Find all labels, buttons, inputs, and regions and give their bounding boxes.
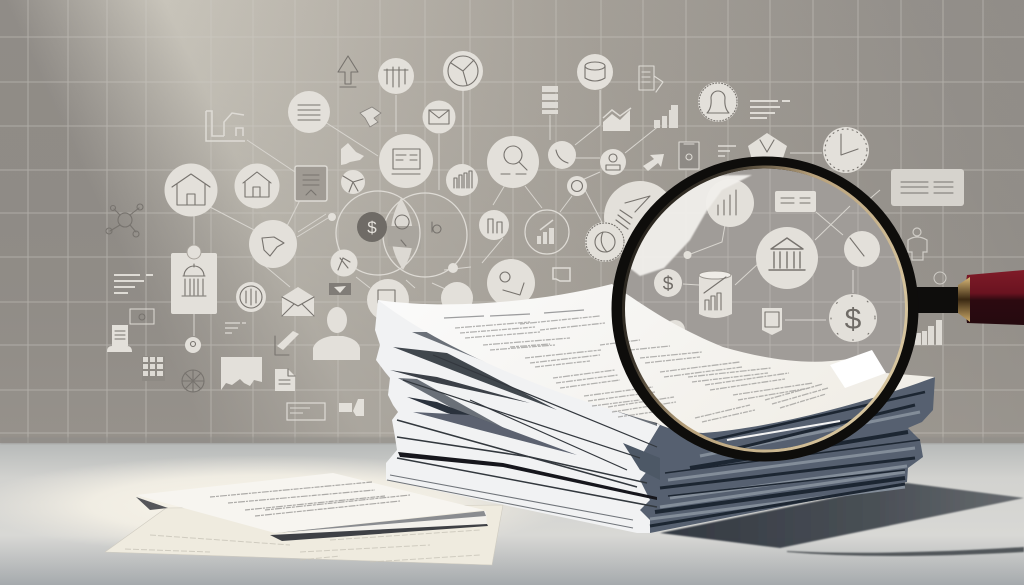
icon: bell circle: [698, 82, 738, 122]
icon: light bulb circle: [185, 337, 201, 353]
icon: bars lower right: [915, 320, 942, 345]
icon: globe: [341, 170, 365, 194]
icon: small bars in lens: [670, 320, 685, 330]
icon: speech bubble circle: [367, 279, 409, 321]
icon: bars circle: [446, 164, 478, 196]
icon: laptop circle: [379, 134, 433, 188]
icon: gear circle: [585, 222, 625, 262]
curled highlight: [830, 350, 886, 388]
icon: arrow: [643, 154, 664, 171]
icon: small house circle: [234, 164, 280, 208]
icon: small circle right: [934, 272, 946, 284]
icon: ring circle: [567, 176, 587, 196]
icon: document: [275, 369, 295, 391]
icon: text box: [287, 403, 325, 420]
connector lines in lens: [683, 206, 853, 320]
handle grip: [965, 270, 1024, 325]
icon: envelope circle: [422, 100, 456, 134]
icon: dollar clock: $: [845, 303, 862, 336]
icon: arrow tree: [338, 56, 358, 87]
white highlight on right face: [727, 421, 840, 440]
desk surface: [0, 437, 1024, 585]
icon: person silhouette: [313, 307, 360, 360]
right face: [640, 377, 935, 533]
top sheet: [378, 284, 935, 433]
shadows beneath front sheet: [136, 497, 168, 510]
icon: bank circle: [756, 227, 818, 289]
handle stem: [905, 287, 960, 313]
icon: wheel: [182, 370, 204, 392]
icon: jagged card: [221, 357, 262, 390]
icon: document with people: [107, 325, 132, 352]
icon: text box in lens: [775, 191, 816, 212]
icon: house circle: [164, 164, 218, 216]
icon: standing man: [908, 228, 927, 260]
connector lines: [194, 90, 880, 336]
icon: pencil: [275, 331, 299, 355]
icon: rising chart circle: [525, 210, 569, 254]
icon: magnifier circle: [487, 136, 539, 188]
icon: dollar circle in lens: [654, 269, 682, 297]
lens contents: [630, 168, 905, 373]
left face wedges: [390, 332, 660, 500]
loose papers on desk: [105, 473, 503, 565]
icon: dot in lens: [684, 251, 692, 259]
magnifying glass: [618, 162, 1024, 456]
icon: square document: [295, 166, 327, 201]
icon: mini text: [225, 323, 246, 333]
icon: document circle: [604, 181, 676, 253]
front sheet: [136, 473, 484, 533]
icon: coin: [236, 282, 266, 312]
icon: mountain chart: [603, 108, 631, 131]
icon: capitol card: [171, 245, 217, 314]
icon: clock: [823, 127, 869, 173]
icons: left network: [106, 51, 483, 420]
icon: text lines circle: [288, 91, 330, 133]
reflection of paper: [622, 175, 752, 276]
icon: small card: [130, 309, 154, 324]
icon: drum circle: [577, 54, 613, 90]
document text: [444, 310, 828, 422]
icon: map circle: [487, 259, 535, 307]
icon: leaf circle: [249, 220, 297, 268]
venn diagram: [336, 191, 467, 277]
lens grid: [638, 168, 905, 362]
icon: phone circle: [548, 141, 576, 169]
ferrule: [958, 277, 970, 322]
icon: bars circle in lens: [706, 179, 754, 227]
icon: small node dot: [328, 213, 336, 221]
icon: dollar clock: [829, 294, 877, 342]
icon: envelope: [282, 287, 314, 316]
left face body: [375, 300, 660, 533]
icon: grid: [142, 356, 165, 381]
icon: dollar dark circle: $: [367, 218, 377, 237]
icon: clipboard: [679, 142, 699, 169]
icon: clock in lens: [844, 231, 880, 267]
icon: person circle: [600, 149, 626, 175]
icon: node circle lower: [441, 282, 473, 314]
icon: mini chart: [339, 399, 364, 416]
icon: badge: [762, 308, 782, 335]
icon: small blob: [341, 143, 364, 165]
glass tint: [638, 168, 905, 373]
icon: document hand: [639, 66, 663, 92]
icon: leaf shape: [360, 107, 381, 127]
icon: chart cylinder: [699, 270, 732, 318]
icon: large text box: [891, 169, 964, 206]
icon: server stack: [542, 86, 558, 114]
right face light bands: [650, 412, 920, 519]
icon: text lines: [114, 275, 153, 293]
icon: people circle: [378, 58, 414, 94]
paper stack: [375, 284, 935, 533]
left face thin lines: [387, 332, 657, 528]
wall background with grid: [0, 0, 1024, 444]
icon: chat box: [553, 268, 570, 281]
icon: mini map: [329, 283, 351, 295]
back sheet: [105, 505, 503, 565]
icon: node dot: [448, 263, 458, 273]
icon: text lines: [750, 101, 790, 118]
icon: small bars circle: [479, 210, 509, 240]
icon: dollar circle in lens: $: [663, 274, 674, 295]
right face dark bands: [650, 392, 925, 526]
icon: figures circle: [330, 250, 358, 276]
icon: line chart crane: [206, 111, 245, 141]
lens black ring: [618, 162, 912, 456]
lens gold rim: [624, 167, 906, 451]
icon: molecule: [106, 204, 143, 237]
icon: pentagon badge: [748, 133, 787, 170]
shadow of stack: [660, 483, 1024, 556]
icon: bars: [654, 105, 678, 128]
icon: pie chart circle: [443, 51, 483, 91]
icon: mini lines: [718, 146, 736, 156]
icons: right network: [479, 54, 964, 345]
